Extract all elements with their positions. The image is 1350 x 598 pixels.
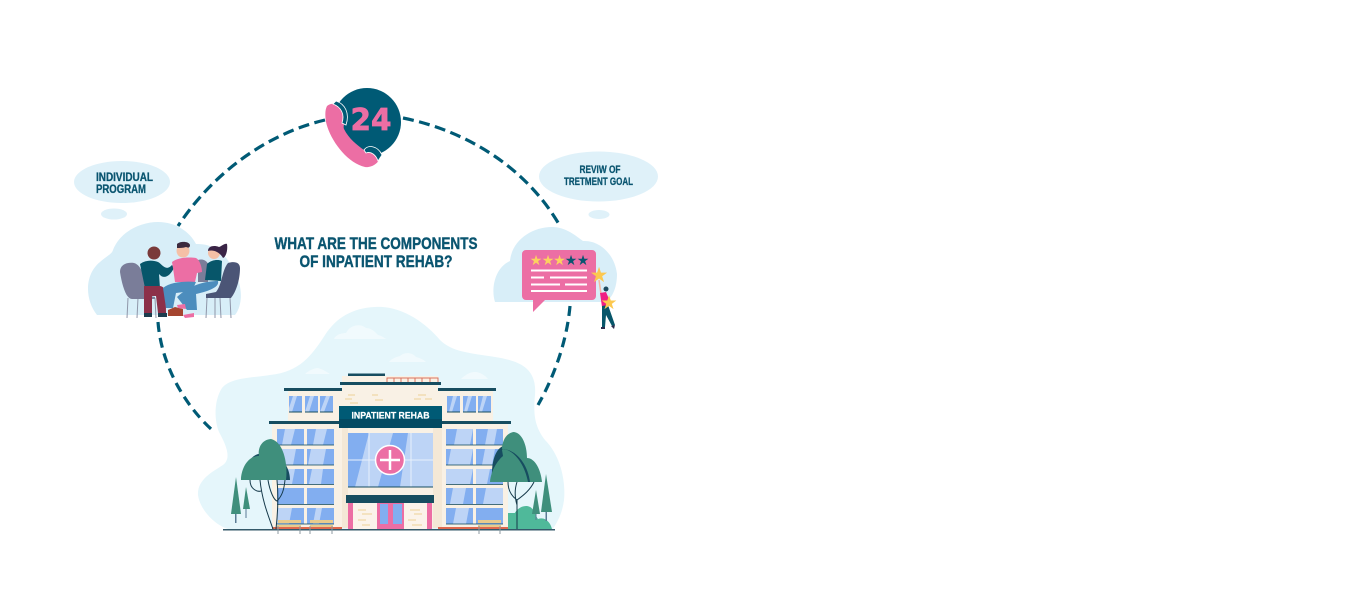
left wing: [269, 388, 342, 528]
icon: 24 hour phone: 24: [350, 103, 392, 138]
person: man from behind: [140, 246, 174, 317]
right tree and bushes: [490, 432, 552, 529]
right wing: [438, 388, 511, 528]
speech bubble: review of treatment goal: REVIW OF: [580, 164, 621, 176]
sign: [339, 406, 442, 419]
person: woman in teal: [177, 244, 227, 318]
person with stars: [590, 263, 618, 329]
canopy and door: [346, 495, 434, 503]
central block: INPATIENT REHAB: [352, 410, 430, 420]
person with stars: ★: [590, 263, 608, 287]
cloud: [493, 227, 617, 302]
ground and curb: [223, 527, 555, 530]
review card: ★: [565, 253, 577, 269]
person with stars: ★: [600, 292, 618, 314]
review card: ★: [542, 253, 554, 269]
review card: ★: [553, 253, 566, 269]
title: OF INPATIENT REHAB?: [300, 253, 452, 271]
central block: [339, 374, 442, 529]
illustration: group therapy: [88, 222, 241, 318]
review card: ★: [577, 253, 589, 269]
window: [348, 433, 433, 487]
left tree: [231, 439, 290, 529]
speech bubble: review of treatment goal: [539, 152, 658, 219]
background blob: [198, 307, 564, 529]
icon: 24 hour phone: [325, 88, 401, 167]
speech bubble: individual program: INDIVIDUAL: [96, 172, 153, 184]
cloud: [88, 222, 241, 315]
benches: [277, 522, 501, 534]
review card: [522, 250, 596, 312]
speech bubble: review of treatment goal: TRETMENT GOAL: [564, 176, 633, 188]
person: man in pink: [163, 242, 202, 316]
plus badge: [376, 446, 404, 474]
speech bubble: individual program: [74, 161, 170, 220]
dashed circle connector: [158, 118, 570, 429]
speech bubble: individual program: PROGRAM: [96, 184, 146, 196]
title: WHAT ARE THE COMPONENTS: [274, 235, 478, 253]
illustration: review card: [493, 227, 618, 329]
review card: ★: [530, 253, 542, 269]
illustration: hospital scene: [198, 307, 564, 534]
chairs: [120, 259, 240, 318]
clouds: [305, 325, 488, 379]
